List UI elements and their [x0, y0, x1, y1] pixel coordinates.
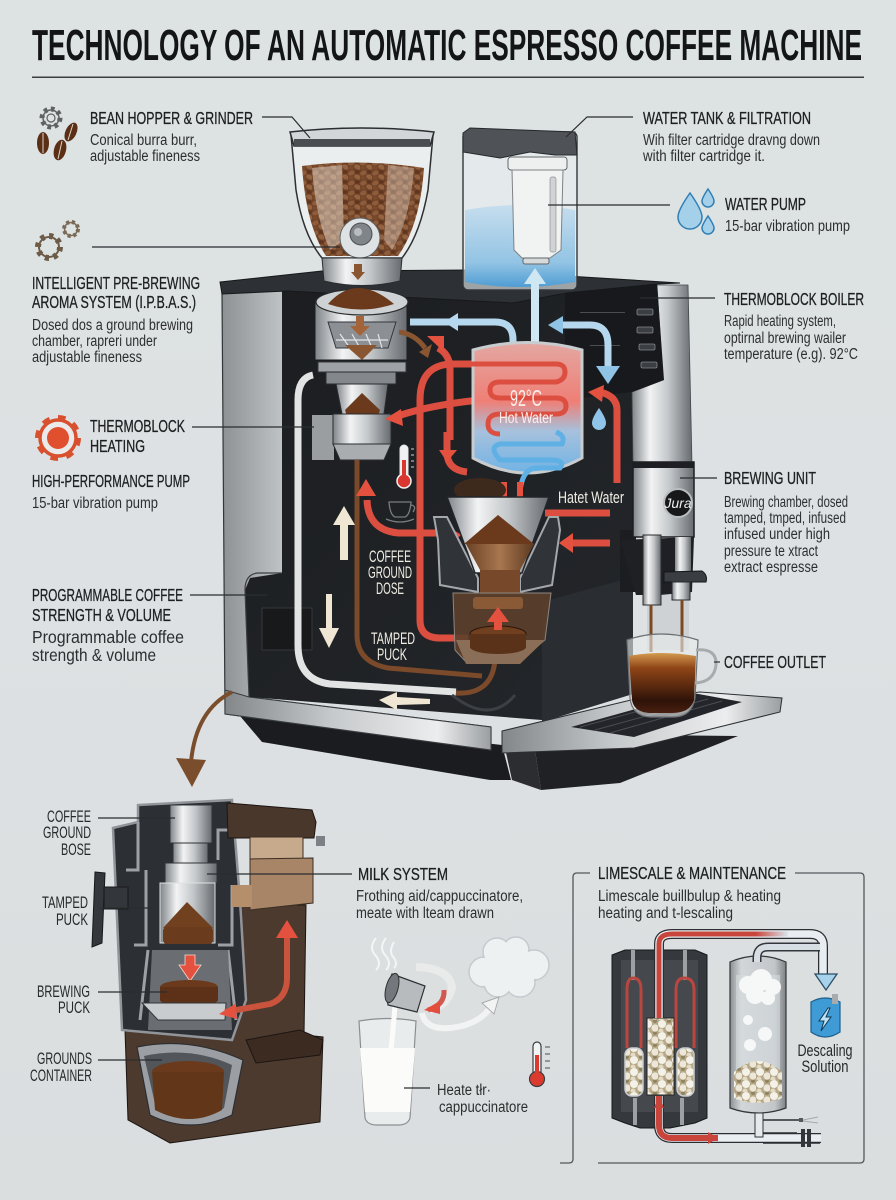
coffee hopper and grinder — [290, 128, 434, 286]
grinder collar — [322, 258, 402, 286]
water in tank — [465, 205, 575, 287]
label: bean hopper and grinder: BEAN HOPPER & GRINDER — [90, 108, 253, 128]
cream direction arrows — [319, 506, 430, 710]
label: water pump — [548, 189, 850, 235]
brewing unit cutaway — [92, 800, 325, 1143]
right heating element — [676, 978, 694, 1048]
cutaway labels: BREWING — [37, 982, 90, 1001]
label: brewing unit: pressure te xtract — [724, 543, 819, 560]
right spout — [664, 571, 706, 582]
curved arrow to cloud — [422, 997, 499, 1028]
thermometer icon — [397, 445, 414, 488]
milk description: meate with lteam drawn — [356, 905, 494, 922]
filter cartridge — [508, 157, 567, 264]
labels on machine — [368, 547, 415, 664]
label: water tank and filtration — [566, 108, 820, 165]
leader: grinder burr — [92, 246, 340, 248]
label: thermoblock boiler: optirnal brewing wailer — [724, 330, 846, 347]
hopper lid — [290, 128, 434, 146]
cutaway labels: TAMPED — [42, 893, 88, 912]
machine top plate — [220, 270, 680, 303]
pipe arrowheads — [654, 1097, 664, 1108]
right face shade — [542, 577, 633, 722]
brown lower right housing — [125, 905, 323, 1143]
inner step — [473, 597, 523, 609]
icon: gears — [38, 222, 78, 258]
limescale description: Limescale buillbulup & heating — [598, 888, 781, 905]
milk annotation — [404, 1082, 528, 1116]
left heating element — [627, 978, 641, 1048]
tamped puck — [470, 626, 526, 654]
cutaway labels: CONTAINER — [30, 1066, 92, 1085]
hot water pipes — [367, 348, 617, 638]
tank lid — [463, 128, 577, 158]
water pipes — [410, 268, 620, 384]
icon: water drops — [678, 189, 714, 234]
hot water label: Hatet Water — [558, 489, 624, 507]
descaling label: Descaling — [798, 1041, 852, 1060]
milk annotation: cappuccinatore — [439, 1099, 528, 1116]
cylinder — [160, 883, 215, 943]
milk annotation: Heate tłr· — [437, 1082, 491, 1099]
cutaway labels: GROUND — [43, 823, 91, 842]
glass of milk — [359, 1005, 416, 1125]
machine base and feet — [240, 716, 738, 790]
icon: water drop — [592, 408, 606, 430]
red arrow down — [179, 955, 201, 981]
boiler — [450, 342, 582, 492]
label: programmable coffee strength and volume: PROGRAMMABLE COFFEE — [32, 585, 183, 605]
outer housing — [434, 517, 478, 592]
label: thermoblock heating: THERMOBLOCK — [90, 416, 185, 436]
labels on machine: DOSE — [376, 579, 404, 598]
water tank — [463, 128, 577, 290]
cutaway labels: COFFEE — [47, 807, 91, 826]
descaling label — [798, 1041, 852, 1076]
label: water tank and filtration: with filter cartridge it. — [642, 148, 765, 165]
label: programmable coffee strength and volume: STRENGTH & VOLUME — [32, 605, 171, 625]
label: coffee outlet — [714, 652, 826, 672]
label: thermoblock boiler — [640, 289, 864, 363]
descaling label: Solution — [802, 1057, 848, 1076]
brewing funnel assembly — [434, 478, 560, 710]
logo: Jura — [663, 495, 692, 511]
panel: limescale and maintenance — [560, 863, 864, 1163]
limescale description — [598, 888, 781, 922]
label: high-performance pump: 15-bar vibration pump — [32, 495, 158, 512]
boiler: Hot Water — [499, 410, 554, 427]
label: thermoblock boiler: temperature (e.g). 92°C — [724, 346, 858, 363]
labels on machine: TAMPED — [371, 629, 415, 648]
label: brewing unit: tamped, tmped, infused — [724, 510, 846, 527]
central scale column — [647, 1018, 674, 1095]
label: programmable coffee strength and volume: strength & volume — [32, 645, 156, 665]
upper return tube — [757, 947, 820, 962]
labels on machine: COFFEE — [369, 547, 411, 566]
label: thermoblock heating: HEATING — [90, 436, 145, 456]
coffee beans — [302, 162, 424, 256]
label: bean hopper and grinder: adjustable fineness — [90, 148, 200, 165]
label: intelligent pre-brewing aroma system — [32, 273, 200, 366]
machine black front — [245, 288, 660, 720]
cutaway labels: BOSE — [61, 840, 91, 859]
labels on machine: PUCK — [377, 645, 407, 664]
descale cylinder — [730, 956, 786, 1113]
coffee cone and disc — [163, 902, 213, 928]
label: intelligent pre-brewing aroma system: chamber, rapreri under — [32, 333, 157, 350]
scale deposits — [734, 1061, 782, 1103]
limescale description: heating and t-lescaling — [598, 905, 733, 922]
cutaway labels: PUCK — [58, 998, 90, 1017]
label: brewing unit: Brewing chamber, dosed — [724, 494, 848, 511]
labels on machine: GROUND — [368, 563, 412, 582]
chamber tray — [456, 640, 545, 664]
foam — [739, 969, 781, 1051]
label: intelligent pre-brewing aroma system: adjustable fineness — [32, 349, 142, 366]
label: coffee outlet: COFFEE OUTLET — [724, 652, 826, 672]
hopper bowl — [291, 135, 433, 258]
brown cup — [466, 544, 534, 570]
grounds — [152, 1061, 224, 1083]
silver column behind spout — [647, 590, 689, 650]
icon: red gear — [39, 419, 77, 457]
ring support — [142, 1003, 226, 1020]
label: programmable coffee strength and volume: Programmable coffee — [32, 627, 184, 647]
grounds container — [137, 1044, 243, 1125]
label: bean hopper and grinder: Conical burra burr, — [90, 132, 197, 149]
cooling coil — [494, 432, 563, 492]
milk system — [356, 864, 550, 1125]
label: intelligent pre-brewing aroma system: INTELLIGENT PRE-BREWING — [32, 273, 200, 293]
arrow: brown curved to cutaway — [176, 692, 232, 787]
right silver column — [632, 285, 692, 465]
brown upper housing — [227, 803, 316, 838]
label: bean hopper and grinder — [37, 108, 310, 165]
steam lines — [372, 938, 396, 970]
pouring jug — [382, 972, 425, 1012]
main pipe — [659, 934, 823, 1138]
label: programmable coffee strength and volume — [32, 585, 267, 665]
lower connecting pipes — [755, 1113, 820, 1147]
steam cloud — [469, 937, 549, 997]
label: brewing unit: infused under high — [724, 526, 830, 543]
boiler temperature: 92°C — [510, 385, 542, 411]
water drawer panel — [245, 573, 282, 697]
brewing puck — [160, 980, 218, 1006]
funnel — [447, 497, 549, 573]
display panel — [565, 284, 664, 400]
tray in brown housing — [246, 1030, 323, 1063]
brown coffee tube — [357, 460, 495, 693]
panel border — [560, 873, 864, 1163]
label: water tank and filtration: WATER TANK & FILTRATION — [643, 108, 811, 128]
handle — [92, 872, 128, 947]
label: high-performance pump: HIGH-PERFORMANCE PUMP — [32, 471, 190, 491]
drip tray — [502, 692, 782, 753]
milk heading: MILK SYSTEM — [358, 864, 448, 884]
heating coil — [450, 364, 566, 434]
label: brewing unit: extract espresse — [724, 559, 818, 576]
label: water pump: 15-bar vibration pump — [725, 218, 850, 235]
machine illustration — [220, 128, 782, 790]
red return arrow — [219, 920, 298, 1019]
cup of espresso — [627, 634, 716, 717]
logo — [663, 489, 692, 517]
milk thermometer — [530, 1042, 550, 1086]
piston upper — [170, 805, 212, 843]
label: thermoblock boiler: Rapid heating system, — [724, 313, 836, 330]
inner chamber — [148, 950, 232, 1030]
milk description: Frothing aid/cappuccinatore, — [356, 888, 523, 905]
label: water tank and filtration: Wih filter cartridge dravng down — [643, 132, 820, 149]
coffee streams — [651, 600, 682, 652]
inner shell walls — [126, 822, 236, 1020]
label: intelligent pre-brewing aroma system: AROMA SYSTEM (I.P.B.A.S.) — [32, 292, 196, 312]
lower chamber — [453, 593, 551, 662]
curved arrow to jug — [416, 967, 452, 1014]
label: brewing unit: BREWING UNIT — [724, 468, 816, 488]
coffee cone — [464, 515, 534, 544]
lower group head — [312, 414, 391, 460]
outer gray shell — [113, 800, 246, 1040]
milk description — [356, 888, 523, 922]
label: thermoblock heating — [39, 416, 314, 457]
machine bottom silver strip — [225, 690, 491, 750]
hot water drops down — [497, 482, 527, 510]
icon: gear and beans — [37, 109, 80, 162]
label: high-performance pump — [32, 471, 190, 512]
label: brewing unit — [680, 468, 848, 576]
machine left silver panel — [222, 290, 491, 750]
limescale heading: LIMESCALE & MAINTENANCE — [598, 863, 786, 883]
descaling bottle — [811, 994, 840, 1037]
label: intelligent pre-brewing aroma system: Dosed dos a ground brewing — [32, 317, 193, 334]
cup icon — [386, 502, 415, 522]
grinder burr — [340, 218, 380, 258]
brewing unit — [620, 462, 706, 605]
heater block — [612, 950, 707, 1128]
dark hose — [452, 695, 515, 710]
cutaway labels: GROUNDS — [37, 1049, 92, 1068]
grinding chamber — [315, 288, 432, 420]
cutaway labels — [30, 807, 352, 1085]
white cold water tube — [298, 375, 456, 692]
label: water pump: WATER PUMP — [725, 194, 806, 214]
up arrow — [487, 607, 509, 630]
cutaway labels: PUCK — [56, 910, 88, 929]
blue arrow — [815, 974, 837, 990]
